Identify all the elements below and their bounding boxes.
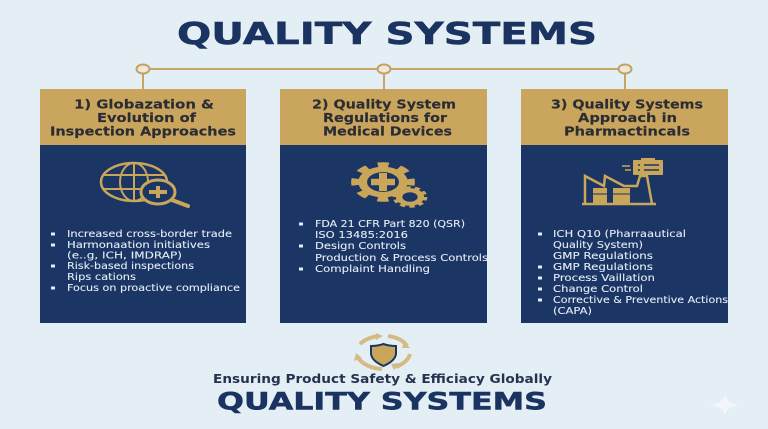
bullet list: panel 3: Process Vaillation xyxy=(553,273,655,284)
heading: panel 1: Evolution of xyxy=(97,110,197,125)
bullet list: panel 1: Rips cations xyxy=(67,272,136,283)
bullet list: panel 2: Production & Process Controls xyxy=(315,253,488,264)
bullet list: panel 1: Harmonaation initiatives xyxy=(67,240,210,251)
connector line with nodes xyxy=(136,64,632,90)
bullet list: panel 1: Risk-based inspections xyxy=(67,261,194,272)
heading: panel 2 xyxy=(312,96,456,138)
footer title: QUALITY SYSTEMS xyxy=(217,388,547,416)
bullet list: panel 3 xyxy=(538,229,728,317)
bullet list: panel 3: Quality System) xyxy=(553,240,643,251)
bullet list: panel 1: Focus on proactive compliance xyxy=(67,283,240,294)
bullet list: panel 3: ICH Q10 (Pharraautical xyxy=(553,229,686,240)
bullet list: panel 1 xyxy=(51,229,240,294)
panel: globalization xyxy=(40,89,246,323)
bullet list: panel 2: Complaint Handling xyxy=(315,264,430,275)
bullet list: panel 3: GMP Regulations xyxy=(553,262,653,273)
icon: shield with cycle arrows xyxy=(354,333,410,370)
bullet list: panel 1: Increased cross-border trade xyxy=(67,229,232,240)
title: QUALITY SYSTEMS xyxy=(177,17,597,52)
bullet list: panel 3: Corrective & Preventive Actions xyxy=(553,295,728,306)
heading: panel 2: Medical Devices xyxy=(323,124,452,138)
bullet list: panel 3: Change Control xyxy=(553,284,643,295)
heading: panel 2: 2) Quality System xyxy=(312,96,456,112)
tagline: Ensuring Product Safety & Efficiacy Globally xyxy=(213,372,552,386)
heading: panel 3 xyxy=(551,96,703,138)
icon: globe with magnifier xyxy=(101,163,188,206)
bullet list: panel 2: FDA 21 CFR Part 820 (QSR) xyxy=(315,219,465,230)
heading: panel 1: Inspection Approaches xyxy=(50,124,236,138)
panel: medical devices xyxy=(280,89,488,323)
panel: pharmaceuticals xyxy=(521,89,728,323)
heading: panel 3: Approach in xyxy=(578,110,677,125)
icon: gears with plus xyxy=(357,166,424,206)
icon: factory with clipboard xyxy=(582,158,663,204)
heading: panel 1 xyxy=(50,96,236,138)
heading: panel 2: Regulations for xyxy=(323,110,448,125)
bullet list: panel 2: Design Controls xyxy=(315,241,406,252)
bullet list: panel 2: ISO 13485:2016 xyxy=(315,230,408,241)
heading: panel 3: 3) Quality Systems xyxy=(551,96,703,112)
bullet list: panel 1: (e..g, ICH, IMDRAP) xyxy=(67,250,182,262)
icon: sparkle xyxy=(711,395,739,415)
bullet list: panel 3: (CAPA) xyxy=(553,306,592,317)
heading: panel 3: Pharmactincals xyxy=(564,124,690,138)
bullet list: panel 3: GMP Regulations xyxy=(553,251,653,262)
heading: panel 1: 1) Globazation & xyxy=(74,96,214,112)
bullet list: panel 2 xyxy=(299,219,488,275)
